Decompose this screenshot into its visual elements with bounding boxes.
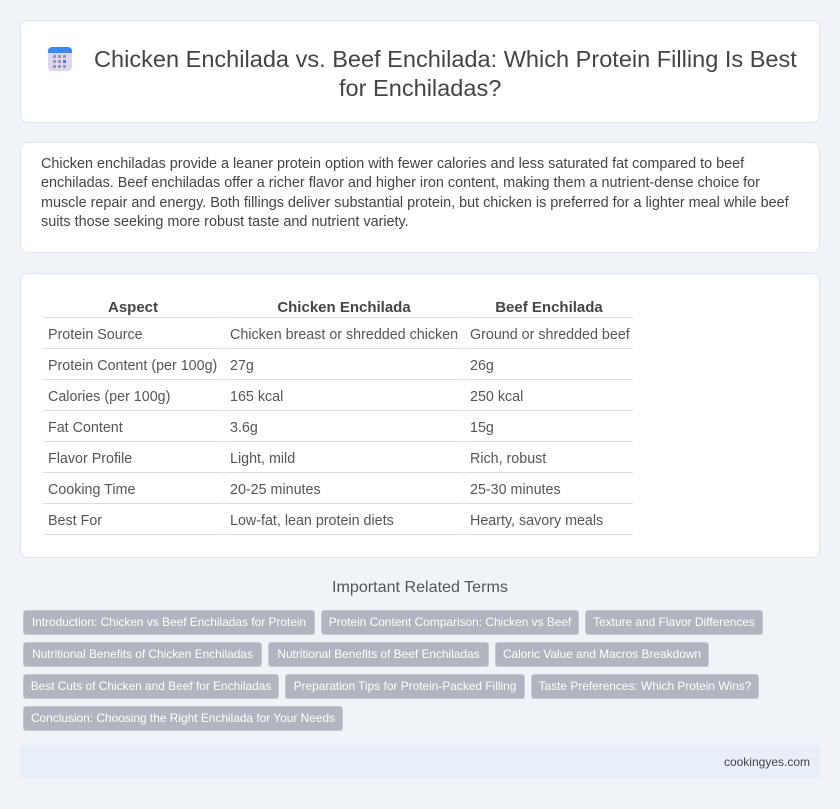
comparison table: Protein Source (48, 327, 143, 343)
comparison table: Rich, robust (470, 451, 546, 467)
footer credit: cookingyes.com (724, 755, 810, 769)
comparison table: 20-25 minutes (230, 482, 321, 498)
comparison table: Fat Content (48, 420, 123, 436)
title: Chicken Enchilada vs. Beef Enchilada: Which Protein Filling Is Best (94, 46, 797, 72)
related terms tags: Introduction: Chicken vs Beef Enchiladas for Protein (32, 615, 306, 629)
comparison table (43, 299, 633, 535)
comparison table: 26g (470, 358, 494, 374)
comparison table: 165 kcal (230, 389, 283, 405)
comparison table: 15g (470, 420, 494, 436)
comparison table: Protein Content (per 100g) (48, 358, 217, 374)
comparison table: Cooking Time (48, 482, 135, 498)
related terms tags: Protein Content Comparison: Chicken vs Beef (329, 615, 571, 629)
comparison table: Light, mild (230, 451, 295, 467)
related terms tags: Nutritional Benefits of Chicken Enchiladas (32, 647, 253, 661)
comparison table: Flavor Profile (48, 451, 132, 467)
comparison table: Chicken Enchilada (277, 299, 411, 316)
related terms tags: Taste Preferences: Which Protein Wins? (539, 679, 751, 693)
intro text: Chicken enchiladas provide a leaner protein option with fewer calories and less saturated fat compared to beef (41, 156, 744, 172)
related terms heading: Important Related Terms (332, 578, 508, 596)
comparison table: Calories (per 100g) (48, 389, 170, 405)
intro card (20, 142, 820, 253)
intro text (41, 156, 789, 230)
comparison table: Low-fat, lean protein diets (230, 513, 394, 529)
related terms tags: Conclusion: Choosing the Right Enchilada for Your Needs (31, 711, 335, 725)
comparison table: Chicken breast or shredded chicken (230, 327, 458, 343)
comparison table: Hearty, savory meals (470, 513, 603, 529)
title card (20, 20, 820, 123)
comparison table: Ground or shredded beef (470, 327, 630, 343)
comparison table: Best For (48, 513, 102, 529)
icon: calendar (48, 47, 72, 71)
related terms tags: Best Cuts of Chicken and Beef for Enchiladas (31, 679, 271, 693)
intro text: muscle repair and energy. Both fillings deliver substantial protein, but chicken is preferred for a lighter meal while beef (41, 195, 789, 211)
related terms tags: Nutritional Benefits of Beef Enchiladas (277, 647, 480, 661)
related terms tags (23, 610, 763, 731)
intro text: enchiladas. Beef enchiladas offer a richer flavor and higher iron content, making them a nutrient-dense choice for (41, 175, 760, 191)
related terms tags: Caloric Value and Macros Breakdown (503, 647, 701, 661)
table card (20, 273, 820, 558)
comparison table: Aspect (108, 299, 158, 316)
related terms tags: Texture and Flavor Differences (593, 615, 755, 629)
footer (20, 745, 820, 779)
related terms tags: Preparation Tips for Protein-Packed Filling (294, 679, 516, 693)
comparison table: 27g (230, 358, 254, 374)
comparison table: Beef Enchilada (495, 299, 603, 316)
comparison table: 3.6g (230, 420, 258, 436)
comparison table: 25-30 minutes (470, 482, 561, 498)
title (94, 46, 797, 101)
comparison table: 250 kcal (470, 389, 523, 405)
title: for Enchiladas? (339, 75, 501, 101)
intro text: suits those seeking more robust taste and nutrient variety. (41, 214, 409, 230)
